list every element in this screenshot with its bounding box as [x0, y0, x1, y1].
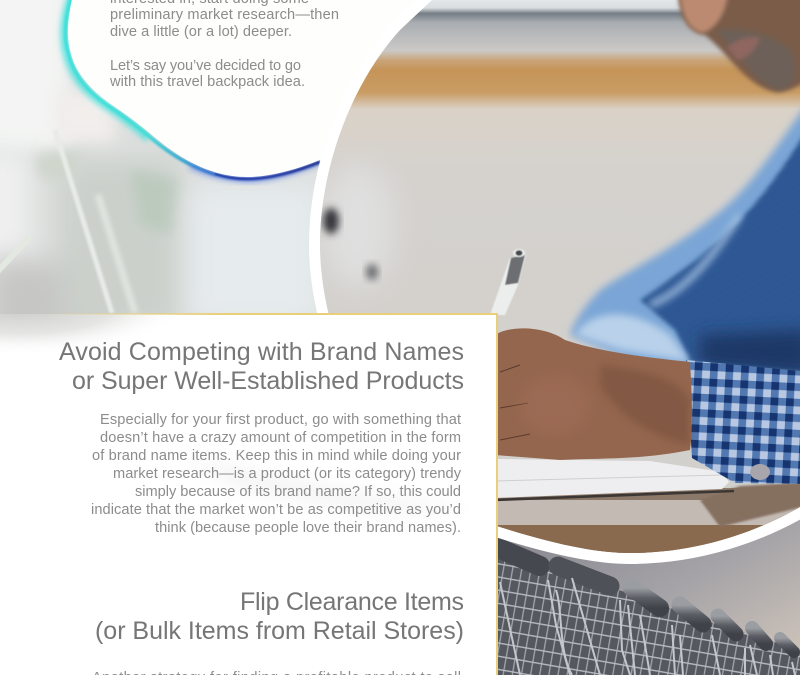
faint background wisp behind body text [180, 455, 470, 515]
intro text: with this travel backpack idea. [109, 74, 305, 90]
gingham cuff [686, 360, 800, 484]
body text: avoid competing: doesn’t have a crazy amount of competition in the form [100, 430, 461, 446]
heading: avoid competing [59, 338, 464, 395]
body text: avoid competing: think (because people love their brand names). [155, 520, 461, 536]
blob fill [68, 0, 440, 177]
face [678, 0, 800, 92]
hand [495, 328, 692, 460]
blob glow edge [65, 0, 320, 179]
intro text: Let’s say you’ve decided to go [110, 58, 301, 74]
body text: avoid competing [91, 412, 462, 536]
panel background [0, 314, 497, 675]
cuff button [750, 464, 770, 480]
heading: avoid competing: Avoid Competing with Brand Names [59, 338, 464, 366]
body text: avoid competing: indicate that the market won’t be as competitive as you’d [91, 502, 461, 518]
cart handles [498, 548, 794, 652]
white ring around photo [320, 0, 800, 553]
body text: avoid competing: of brand name items. Keep this in mind while doing your [92, 448, 461, 464]
blurred object [322, 163, 394, 287]
table [495, 482, 800, 558]
cart bright frame bars [500, 578, 795, 675]
body text: avoid competing: market research—is a product (or its category) trendy [113, 466, 462, 482]
panel border [0, 314, 497, 675]
blue shirt [570, 100, 800, 375]
intro text [109, 0, 339, 90]
grey background wisp at panel corner [0, 314, 220, 404]
curved callout: white blob with cyan-to-blue edge [63, 0, 440, 180]
intro text: dive a little (or a lot) deeper. [110, 24, 292, 40]
heading: flip clearance: (or Bulk Items from Retail Stores) [95, 617, 464, 645]
text panel [0, 314, 497, 675]
blurred background: left photo [0, 0, 320, 314]
wall background [320, 0, 800, 488]
shopping carts photo [498, 520, 800, 675]
sky behind carts [498, 520, 800, 650]
cart wire mesh [498, 552, 800, 675]
body text: avoid competing: Especially for your first product, go with something that [100, 412, 461, 428]
heading: avoid competing: or Super Well-Established Products [72, 367, 464, 395]
photo: man writing in notebook [300, 0, 800, 560]
notebook [495, 459, 734, 500]
pen [490, 249, 526, 315]
intro text: preliminary market research—then [110, 7, 339, 23]
heading: flip clearance [95, 588, 464, 645]
body text: avoid competing: simply because of its brand name? If so, this could [135, 484, 461, 500]
heading: flip clearance: Flip Clearance Items [240, 588, 464, 616]
